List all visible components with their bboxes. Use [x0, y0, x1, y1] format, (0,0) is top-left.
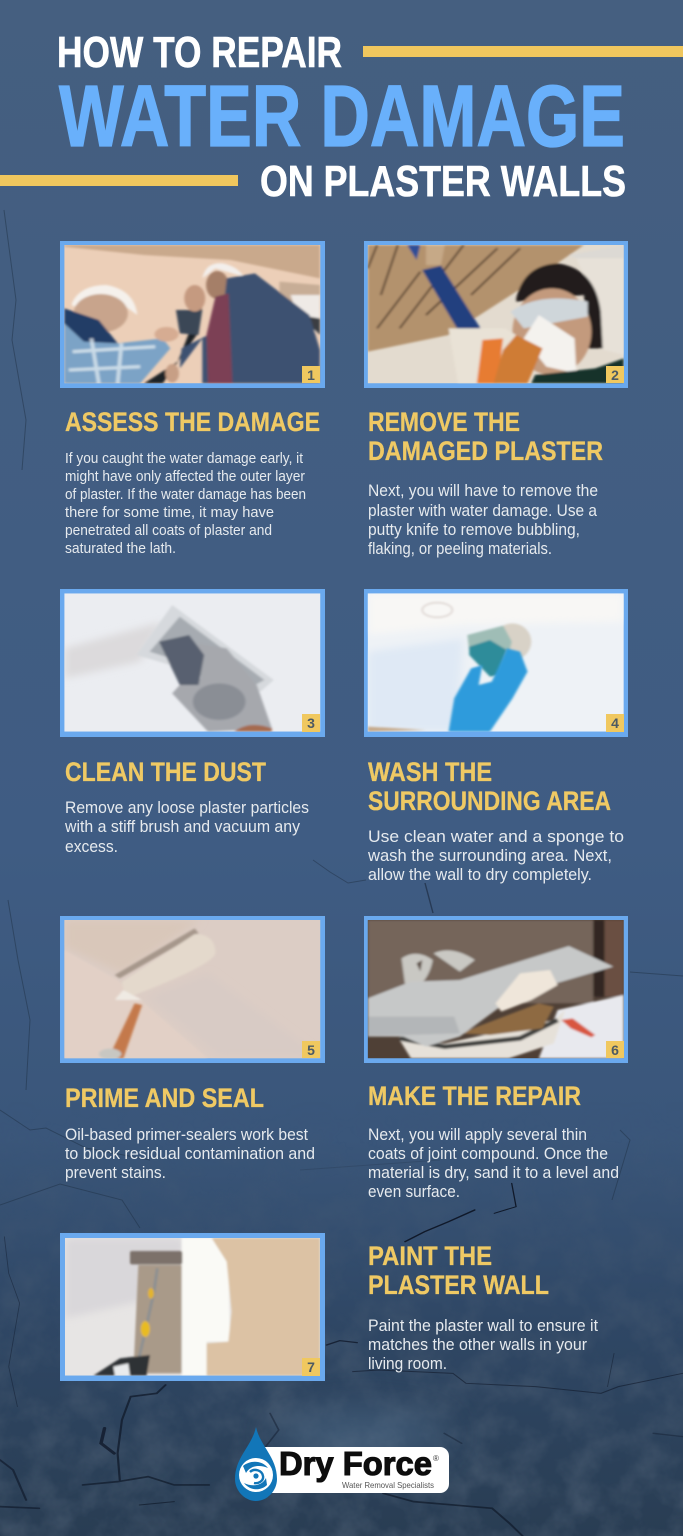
badge 2 [606, 366, 624, 383]
body 6 [368, 1126, 619, 1201]
body 4: wash the surrounding area. Next, [367, 847, 612, 865]
badge 5 [302, 1041, 320, 1058]
body 6: material is dry, sand it to a level and [368, 1164, 619, 1182]
badge 3 [302, 714, 320, 732]
photo 2: man scraping ceiling [364, 241, 628, 388]
panel: step 2 remove the damaged plaster [364, 241, 628, 558]
badge 4 [606, 714, 624, 732]
photo 4: blue glove with sponge [364, 589, 628, 737]
badge 5: 5 [307, 1042, 315, 1058]
body 1: of plaster. If the water damage has been [65, 486, 306, 503]
badge 1: 1 [307, 367, 315, 383]
photo 1: inspectors [60, 241, 325, 388]
badge 1 [302, 366, 320, 383]
panel: step 7 paint the plaster wall [60, 1233, 598, 1381]
heading 7: PLASTER WALL [368, 1270, 549, 1300]
badge 7 [302, 1358, 320, 1376]
body 2: flaking, or peeling materials. [368, 540, 552, 558]
body 4: allow the wall to dry completely. [368, 866, 592, 884]
logo tagline: Water Removal Specialists [342, 1480, 434, 1490]
photo 6: putty knife over compound bucket [364, 916, 628, 1063]
panel: step 5 prime and seal [60, 916, 325, 1182]
body 1: might have only affected the outer layer [65, 468, 305, 485]
body 2 [368, 482, 598, 558]
body 5: to block residual contamination and [65, 1145, 315, 1163]
accent bar top [363, 46, 683, 57]
body 1: saturated the lath. [65, 540, 176, 557]
body 4 [367, 828, 624, 884]
logo: dry force [235, 1427, 449, 1501]
panel: step 4 wash the surrounding area [364, 589, 628, 884]
photo 5: paint roller on ceiling [60, 916, 325, 1063]
body 3 [64, 799, 309, 856]
heading 2: REMOVE THE [368, 407, 520, 437]
panel: step 1 assess the damage [60, 241, 325, 557]
body 6: Next, you will apply several thin [368, 1126, 587, 1144]
badge 4: 4 [611, 715, 619, 731]
body 7 [368, 1317, 598, 1373]
heading 4: WASH THE [368, 757, 492, 787]
badge 3: 3 [307, 715, 315, 731]
body 3: Remove any loose plaster particles [65, 799, 309, 817]
heading 1: ASSESS THE DAMAGE [65, 407, 320, 437]
accent bar bottom [0, 175, 238, 186]
body 1 [65, 450, 306, 557]
heading 4: SURROUNDING AREA [368, 786, 611, 816]
body 5: prevent stains. [65, 1164, 166, 1182]
heading 2: DAMAGED PLASTER [368, 436, 603, 466]
panel: step 6 make the repair [364, 916, 628, 1201]
panel: step 3 clean the dust [60, 589, 325, 856]
body 7: Paint the plaster wall to ensure it [368, 1317, 598, 1335]
logo plate [250, 1447, 449, 1493]
heading 6: MAKE THE REPAIR [368, 1081, 581, 1111]
badge 7: 7 [307, 1359, 315, 1375]
body 5 [65, 1126, 315, 1182]
heading 3: CLEAN THE DUST [65, 757, 266, 787]
body 7: matches the other walls in your [368, 1336, 587, 1354]
icon: water drop with swirl [235, 1427, 277, 1501]
photo 3: gloved hand with sanding block [60, 589, 325, 737]
body 1: penetrated all coats of plaster and [65, 522, 272, 539]
heading 7 [368, 1241, 549, 1300]
badge 6 [606, 1041, 624, 1058]
body 6: even surface. [368, 1183, 460, 1201]
body 1: there for some time, it may have [65, 504, 274, 521]
body 2: Next, you will have to remove the [368, 482, 598, 500]
title line: how to repair: HOW TO REPAIR [57, 28, 342, 77]
heading 5: PRIME AND SEAL [65, 1083, 264, 1113]
body 3: excess. [65, 838, 118, 856]
badge 2: 2 [611, 367, 619, 383]
heading 4 [368, 757, 611, 816]
heading 7: PAINT THE [368, 1241, 492, 1271]
body 4: Use clean water and a sponge to [368, 828, 624, 846]
body 2: putty knife to remove bubbling, [368, 521, 580, 539]
body 2: plaster with water damage. Use a [368, 502, 598, 520]
registered mark: ® [433, 1454, 439, 1463]
body 6: coats of joint compound. Once the [368, 1145, 608, 1163]
logo wordmark: Dry Force [279, 1445, 432, 1482]
title [57, 28, 626, 206]
badge 6: 6 [611, 1042, 619, 1058]
body 1: If you caught the water damage early, it [65, 450, 304, 467]
body 5: Oil-based primer-sealers work best [65, 1126, 308, 1144]
heading 2 [368, 407, 603, 466]
body 7: living room. [368, 1355, 447, 1373]
photo 7: painting a wall with roller [60, 1233, 325, 1381]
body 3: with a stiff brush and vacuum any [64, 818, 301, 836]
